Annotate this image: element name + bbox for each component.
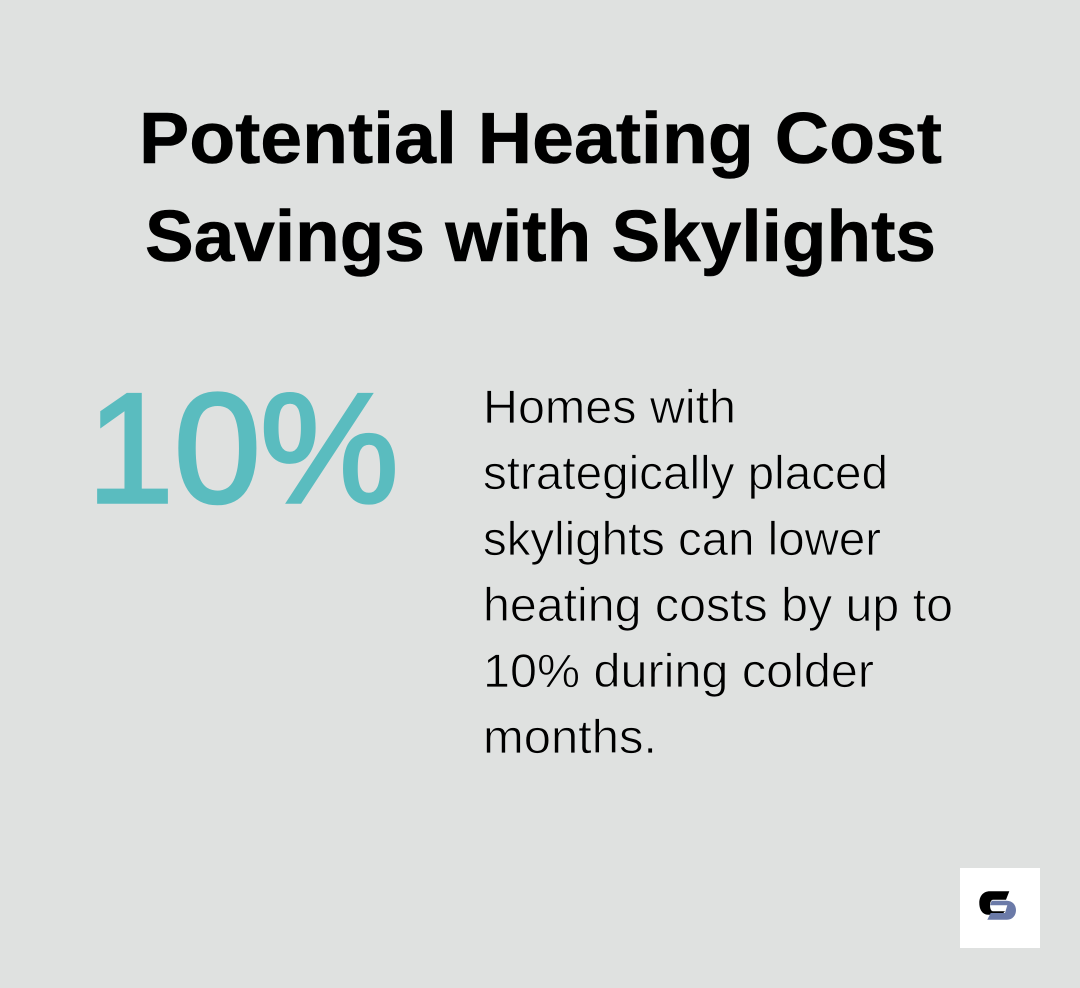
title — [139, 99, 942, 277]
description text: 10% during colder — [483, 644, 874, 697]
title: Potential Heating Cost — [139, 99, 942, 179]
description text: strategically placed — [483, 446, 888, 499]
logo badge — [960, 868, 1040, 948]
icon: logo mark — [979, 891, 1016, 920]
description text: heating costs by up to — [483, 578, 953, 631]
description text: months. — [483, 710, 657, 763]
big statistic: 10%: 10% — [87, 362, 399, 536]
title: Savings with Skylights — [145, 197, 936, 277]
description text: Homes with — [483, 380, 736, 433]
description text: skylights can lower — [483, 512, 881, 565]
description text — [483, 380, 953, 763]
